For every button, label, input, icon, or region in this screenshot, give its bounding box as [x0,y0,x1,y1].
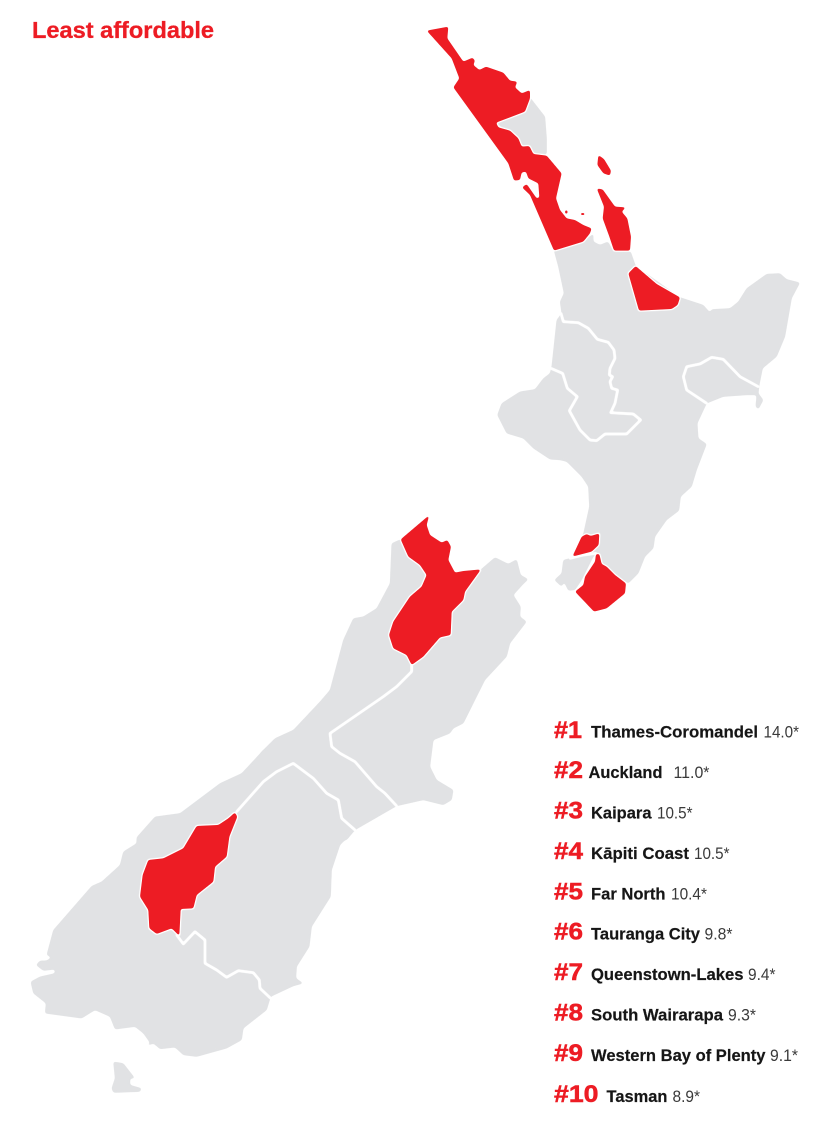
rank 1: 14.0* [764,722,799,742]
rank 5: 10.4* [671,884,707,904]
map: South Island [31,539,528,1093]
Stewart Island [112,1062,142,1093]
title: Least affordable [32,17,214,43]
rank 4: 10.5* [694,844,730,863]
rank 9: 9.1* [770,1046,798,1065]
rank 8: #8 [554,1000,583,1026]
rank 7: #7 [554,959,583,986]
rank 8 [554,1000,756,1026]
rank 7: Queenstown-Lakes [591,965,744,984]
rank 9: Western Bay of Plenty [591,1046,766,1065]
region borders: South Island [177,665,412,998]
rank 10 [554,1081,700,1108]
rank 6: 9.8* [704,924,733,944]
rank 7 [554,959,776,986]
rank 2: #2 [554,757,583,784]
rank 8: 9.3* [728,1006,756,1024]
region: Great Barrier Island [597,155,611,176]
rank 7: 9.4* [748,965,776,984]
ranking list [554,717,799,1108]
rank 5: Far North [591,884,666,904]
rank 3: Kaipara [591,804,652,822]
rank 2: Auckland [588,763,662,782]
region: Far North, Kaipara and Auckland [427,27,592,251]
rank 1 [554,717,799,744]
rank 6: #6 [554,918,583,946]
rank 4: Kāpiti Coast [591,844,689,863]
region borders: North Island [551,313,758,558]
rank 4: #4 [554,838,584,865]
rank 1: #1 [554,717,582,744]
region: Thames-Coromandel [597,188,631,251]
rank 2: 11.0* [674,763,710,782]
rank 3: 10.5* [657,804,693,822]
rank 6 [554,918,733,946]
region: Queenstown-Lakes [140,812,237,936]
rank 1: Thames-Coromandel [591,722,758,742]
region: Tasman [389,515,481,665]
rank 10: Tasman [606,1087,668,1106]
highlighted regions [140,27,680,936]
region: Western Bay of Plenty [628,266,680,311]
rank 8: South Wairarapa [591,1006,724,1024]
rank 10: #10 [554,1081,598,1108]
rank 9 [554,1040,798,1067]
small Hauraki Gulf islets [565,210,584,215]
rank 3 [554,798,693,824]
map: North Island [497,97,800,591]
rank 2 [554,757,710,784]
rank 9: #9 [554,1040,583,1067]
rank 6: Tauranga City [591,924,701,944]
region: Kapiti Coast [572,533,599,557]
rank 10: 8.9* [672,1087,700,1106]
rank 3: #3 [554,798,583,824]
rank 4 [554,838,730,865]
region: South Wairarapa [575,554,626,612]
rank 5 [554,878,707,906]
rank 5: #5 [554,878,583,906]
